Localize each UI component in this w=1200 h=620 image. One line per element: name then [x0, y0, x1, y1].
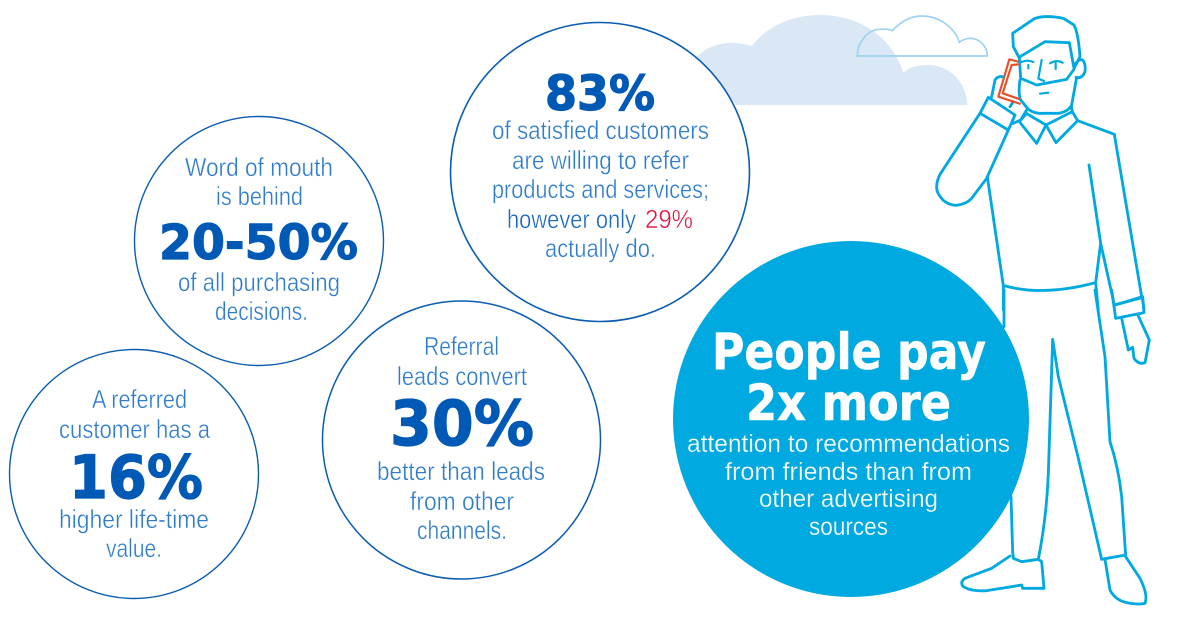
text: referral leads intro: leads convert: [397, 361, 528, 391]
hand: [992, 77, 1027, 124]
text: recommendations: [687, 430, 1010, 541]
text: satisfied customers: [492, 115, 709, 263]
heading: people pay 2x more: People pay: [712, 323, 986, 381]
text: satisfied customers: are willing to refer: [512, 145, 689, 175]
text: referred customer intro: customer has a: [59, 414, 210, 444]
text: purchasing decisions: of all purchasing: [178, 267, 340, 297]
face details: [1022, 60, 1063, 94]
ear: [1076, 60, 1085, 78]
text: better than other channels: channels.: [417, 515, 507, 545]
text: word of mouth intro: is behind: [216, 181, 303, 211]
text: satisfied customers: however only: [507, 204, 636, 234]
text: satisfied customers: 29%: [645, 204, 693, 234]
text: purchasing decisions: decisions.: [215, 296, 308, 326]
right shoe: [1105, 556, 1146, 604]
text: recommendations: sources: [809, 513, 888, 541]
hair: [1013, 17, 1080, 68]
trousers: [1004, 290, 1126, 562]
illustration: man on the phone: [937, 17, 1149, 604]
torso and arm: [987, 121, 1144, 310]
text: better than other channels: from other: [410, 486, 514, 516]
left shoe: [962, 556, 1044, 591]
panel: 20-50 percent circle: [134, 116, 384, 366]
panel: 83 percent circle: [450, 22, 750, 322]
text: better than other channels: [377, 456, 545, 545]
text: life-time value: [59, 504, 209, 563]
text: recommendations: attention to recommendations: [687, 430, 1010, 458]
text: referral leads intro: [397, 331, 528, 391]
text: word of mouth intro: [185, 152, 333, 211]
text: better than other channels: better than leads: [377, 456, 545, 486]
text: referral leads intro: Referral: [424, 331, 499, 361]
stat: 16%: 16%: [69, 443, 203, 513]
stat: 20-50%: 20-50%: [159, 215, 358, 271]
text: life-time value: value.: [106, 533, 162, 563]
text: life-time value: higher life-time: [59, 504, 209, 534]
right cuff and hand: [1112, 290, 1149, 363]
heading: people pay 2x more: 2x more: [746, 374, 951, 432]
beard and jaw: [1019, 57, 1077, 113]
text: purchasing decisions: [178, 267, 340, 326]
text: recommendations: from friends than from: [725, 458, 972, 486]
panel: 30 percent circle: [322, 301, 600, 579]
collar: [1019, 107, 1078, 143]
background cloud: filled: [693, 15, 967, 105]
heading: people pay 2x more: [712, 323, 986, 432]
callout: people pay 2x more circle: [673, 241, 1029, 597]
legs and shoes: [962, 290, 1149, 604]
text: satisfied customers: actually do.: [545, 233, 656, 263]
background cloud: outline: [857, 16, 987, 56]
stat: 83%: 83%: [545, 66, 655, 122]
text: satisfied customers: of satisfied customers: [492, 115, 709, 145]
icon: phone: [998, 59, 1021, 104]
text: recommendations: other advertising: [759, 485, 938, 513]
text: word of mouth intro: Word of mouth: [185, 152, 333, 182]
text: satisfied customers: products and services;: [492, 174, 709, 204]
text: referred customer intro: [59, 384, 210, 444]
bent arm and sleeve: [937, 97, 1015, 205]
upper body and head: [937, 17, 1144, 310]
text: referred customer intro: A referred: [92, 384, 187, 414]
panel: 16 percent circle: [10, 350, 258, 598]
stat: 30%: 30%: [390, 387, 534, 460]
